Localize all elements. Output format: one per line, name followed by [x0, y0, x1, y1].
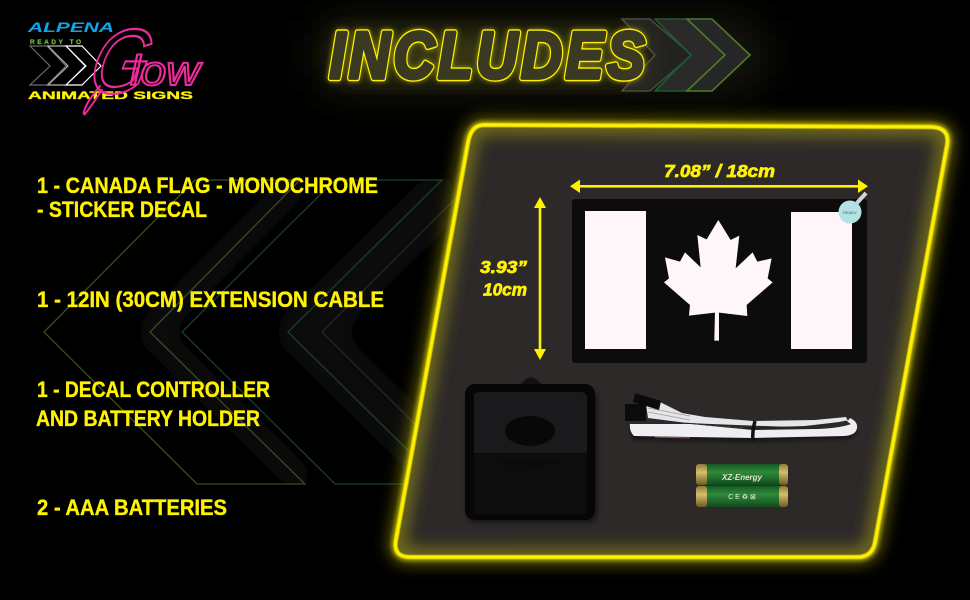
item: controller [36, 377, 270, 431]
controller and battery holder [465, 378, 598, 523]
glow script: low [130, 47, 203, 94]
controller and battery holder: XIHON7S0Z1JW M [502, 460, 558, 467]
sticker seal: READY [843, 210, 857, 215]
AAA batteries: C E ♻ ⊠ [728, 494, 756, 501]
height label: 3.93” [480, 257, 527, 277]
item: controller: AND BATTERY HOLDER [36, 406, 260, 431]
logo chevrons [30, 46, 101, 85]
title: INCLUDES: INCLUDES [330, 19, 648, 93]
maple leaf [664, 220, 773, 341]
item: flag decal: - STICKER DECAL [37, 197, 207, 222]
connectors [633, 393, 661, 410]
width label: 7.08” / 18cm [664, 161, 775, 181]
animated signs: ANIMATED SIGNS [28, 90, 193, 102]
panel: neon product frame [396, 125, 947, 557]
glow script: G [81, 9, 163, 113]
height label: 10cm [483, 280, 527, 300]
title: INCLUDES: INCLUDES [330, 19, 648, 93]
sticker seal [838, 193, 866, 224]
AAA batteries: XZ-Energy [721, 473, 763, 482]
title haze [320, 20, 760, 90]
upper band [646, 402, 848, 428]
height label [480, 257, 527, 300]
logo: Alpena Ready to Glow Animated Signs [27, 9, 203, 114]
item: flag decal: 1 - CANADA FLAG - MONOCHROME [37, 173, 378, 198]
item: batteries: 2 - AAA BATTERIES [37, 495, 227, 520]
ready to: READY TO [30, 39, 81, 46]
flag decal [572, 193, 867, 363]
included items list [36, 173, 384, 520]
glow script [81, 9, 203, 114]
brand name: ALPENA [27, 19, 114, 35]
item: flag decal [37, 173, 378, 222]
item: extension cable: 1 - 12IN (30CM) EXTENSION CABLE [37, 287, 384, 312]
lower band [630, 418, 857, 438]
extension cable [625, 393, 857, 442]
background chevrons [44, 180, 456, 484]
height dimension arrow [534, 197, 546, 360]
cable tie [753, 421, 755, 441]
width dimension arrow [570, 180, 868, 193]
AAA batteries [696, 464, 788, 507]
item: controller: 1 - DECAL CONTROLLER [37, 377, 270, 402]
left bar [585, 211, 646, 349]
right bar [791, 212, 852, 349]
title chevrons [622, 19, 750, 91]
title: INCLUDES: INCLUDES [330, 19, 648, 93]
